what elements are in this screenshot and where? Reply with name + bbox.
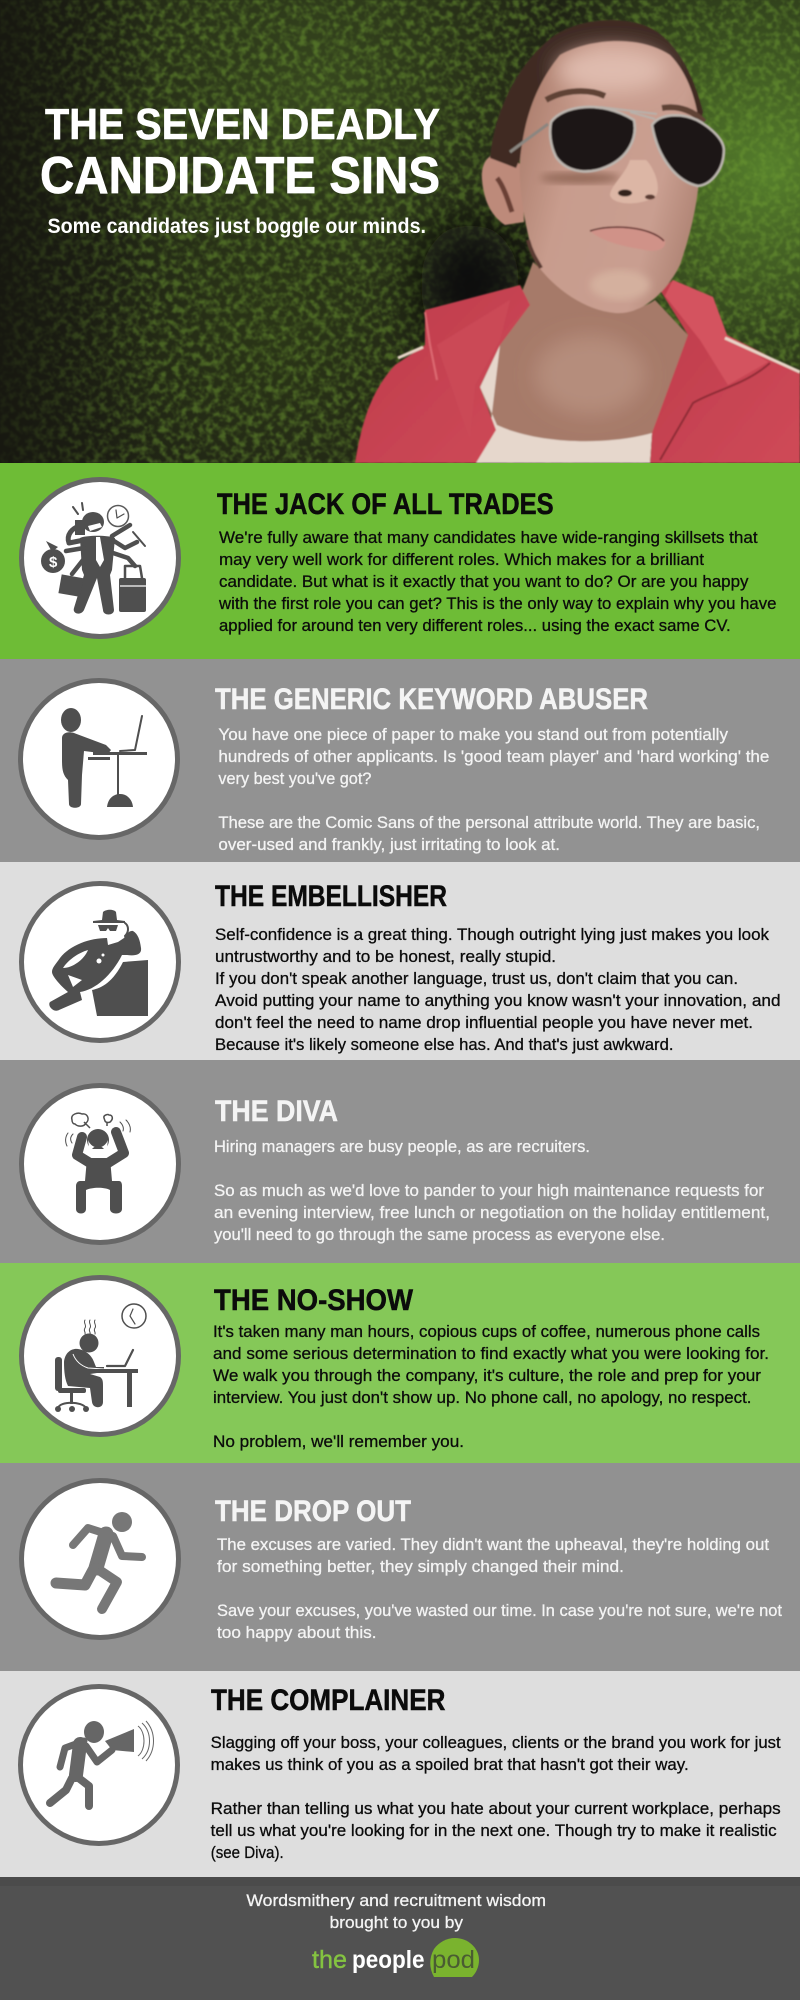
footer credit text [246,1892,546,1932]
text block: Hiring managers are busy people, as are recruiters. [214,1138,590,1156]
logo: the people pod: pod [432,1946,475,1974]
panel: the generic keyword abuser [0,659,800,862]
text block: You have one piece of paper to make you stand out from potentially [218,726,729,744]
footer credit text: Wordsmithery and recruitment wisdom [246,1892,546,1910]
text block: candidate. But what is it exactly that you want to do? Or are you happy [219,573,749,591]
heading: THE DROP OUT [215,1495,411,1528]
text block [211,1734,781,1862]
heading: THE NO-SHOW [214,1284,414,1317]
title [40,100,440,205]
text block: interview. You just don't show up. No phone call, no apology, no respect. [213,1389,752,1407]
text block: So as much as we'd love to pander to your high maintenance requests for [214,1182,765,1200]
panel: the drop out [0,1463,800,1671]
subtitle: Some candidates just boggle our minds. [48,215,426,238]
text block: Save your excuses, you've wasted our time. In case you're not sure, we're not [217,1602,782,1620]
text block [215,926,781,1054]
logo: the people pod: people [352,1946,425,1974]
title: THE SEVEN DEADLY [45,100,440,149]
text block: We're fully aware that many candidates have wide-ranging skillsets that [219,529,758,547]
panel: the diva [0,1060,800,1263]
footer credit text: brought to you by [330,1914,464,1932]
logo: the people pod: the [312,1946,347,1974]
title: CANDIDATE SINS [40,147,440,205]
text block: applied for around ten very different roles... using the exact same CV. [219,617,731,635]
text block: for something better, they simply changed their mind. [217,1558,624,1576]
text block [218,726,769,854]
portrait: man in sunglasses and red jacket [355,20,800,463]
text block: too happy about this. [217,1624,376,1642]
logo: the people pod [312,1938,479,1977]
text block: hundreds of other applicants. Is 'good team player' and 'hard working' the [218,748,769,766]
text block: No problem, we'll remember you. [213,1433,464,1451]
heading: THE COMPLAINER [211,1684,446,1717]
icon: angry figure with raised arms [22,1086,178,1242]
text block: may very well work for different roles. Which makes for a brilliant [219,551,704,569]
text block [213,1323,769,1451]
panel: the no-show [0,1263,800,1463]
icon: spy sitting on a block [22,884,178,1040]
icon: person standing at laptop desk [20,680,178,838]
text block: These are the Comic Sans of the personal attribute world. They are basic, [218,814,760,832]
heading: THE EMBELLISHER [215,880,447,913]
text block: If you don't speak another language, trust us, don't claim that you can. [215,970,738,988]
heading: THE DIVA [215,1095,338,1128]
icon: running figure [22,1480,178,1638]
text block [214,1138,770,1244]
text block: and some serious determination to find exactly what you were looking for. [213,1345,769,1363]
text block: (see Diva). [211,1844,284,1862]
text block: Because it's likely someone else has. And that's just awkward. [215,1036,674,1054]
text block: The excuses are varied. They didn't want the upheaval, they're holding out [217,1536,769,1554]
text block: untrustworthy and to be honest, really stupid. [215,948,556,966]
icon: person at desk with clock [22,1278,178,1434]
panel: the jack of all trades [0,463,800,659]
heading: THE GENERIC KEYWORD ABUSER [215,683,648,716]
text block: very best you've got? [218,770,371,788]
text block: Self-confidence is a great thing. Though outright lying just makes you look [215,926,770,944]
text block: with the first role you can get? This is the only way to explain why you have [218,595,776,613]
panel: the complainer [0,1671,800,1877]
hero photo panel [0,0,800,463]
text block: an evening interview, free lunch or negotiation on the holiday entitlement, [214,1204,770,1222]
text block: tell us what you're looking for in the next one. Though try to make it realistic [211,1822,777,1840]
icon: figure with megaphone [20,1686,178,1844]
text block: Slagging off your boss, your colleagues, clients or the brand you work for just [211,1734,781,1752]
icon: multitasking businessman: $ [49,554,58,571]
text block: makes us think of you as a spoiled brat that hasn't got their way. [211,1756,689,1774]
text block: Avoid putting your name to anything you know wasn't your innovation, and [215,992,781,1010]
panel: the embellisher [0,862,800,1060]
text block [217,1536,782,1642]
text block: don't feel the need to name drop influential people you have never met. [215,1014,753,1032]
text block: over-used and frankly, just irritating to look at. [218,836,560,854]
footer [0,1877,800,2000]
text block: Rather than telling us what you hate about your current workplace, perhaps [211,1800,781,1818]
text block: It's taken many man hours, copious cups of coffee, numerous phone calls [213,1323,760,1341]
text block: you'll need to go through the same process as everyone else. [214,1226,665,1244]
heading: THE JACK OF ALL TRADES [217,488,554,521]
text block [218,529,776,635]
text block: We walk you through the company, it's culture, the role and prep for your [213,1367,762,1385]
icon: multitasking businessman [22,480,178,636]
